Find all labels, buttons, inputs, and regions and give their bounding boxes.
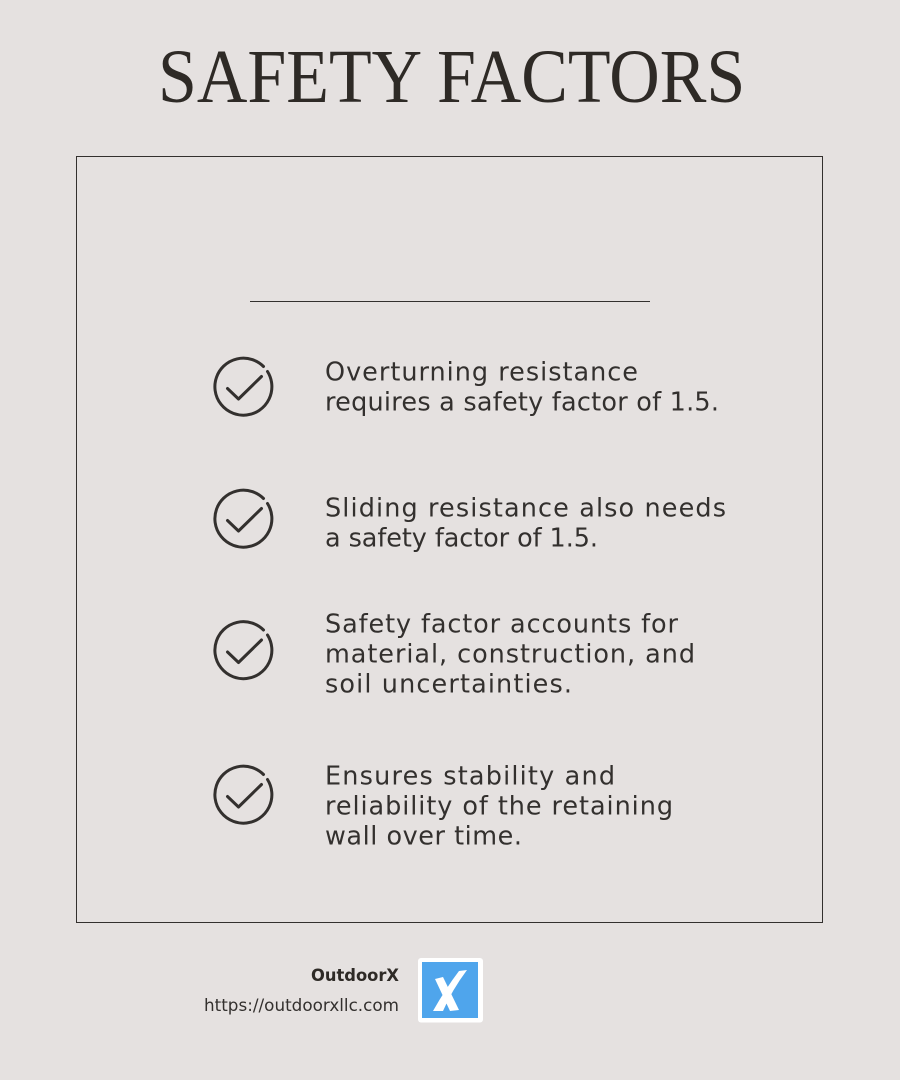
text: sliding resistance: Sliding resistance also needs [325,494,726,524]
text: stability and reliability: reliability of the retaining [325,792,673,822]
text: material uncertainties [325,610,695,700]
footer url: https://outdoorxllc.com [204,996,399,1016]
text: stability and reliability: Ensures stability and [325,762,615,792]
title: SAFETY FACTORS [158,34,745,119]
text: stability and reliability: wall over time. [325,822,522,852]
icon: logo [418,958,483,1022]
text: sliding resistance: a safety factor of 1.5. [325,524,598,554]
text: material uncertainties: material, construction, and [325,640,695,670]
icon: check circle 4 [215,766,272,823]
text: material uncertainties: soil uncertainties. [325,670,572,700]
text: material uncertainties: Safety factor accounts for [325,610,679,640]
text: overturning resistance: requires a safety factor of 1.5. [325,388,719,418]
text: overturning resistance: Overturning resistance [325,358,638,388]
text: stability and reliability [325,762,673,852]
icon: check circle 2 [215,490,272,547]
text: overturning resistance [325,358,719,418]
icon: check circle 3 [215,622,272,679]
text: sliding resistance [325,494,726,554]
panel: safety factors frame [76,156,822,922]
icon: check circle 1 [215,358,272,415]
footer brand name: OutdoorX [311,966,399,986]
